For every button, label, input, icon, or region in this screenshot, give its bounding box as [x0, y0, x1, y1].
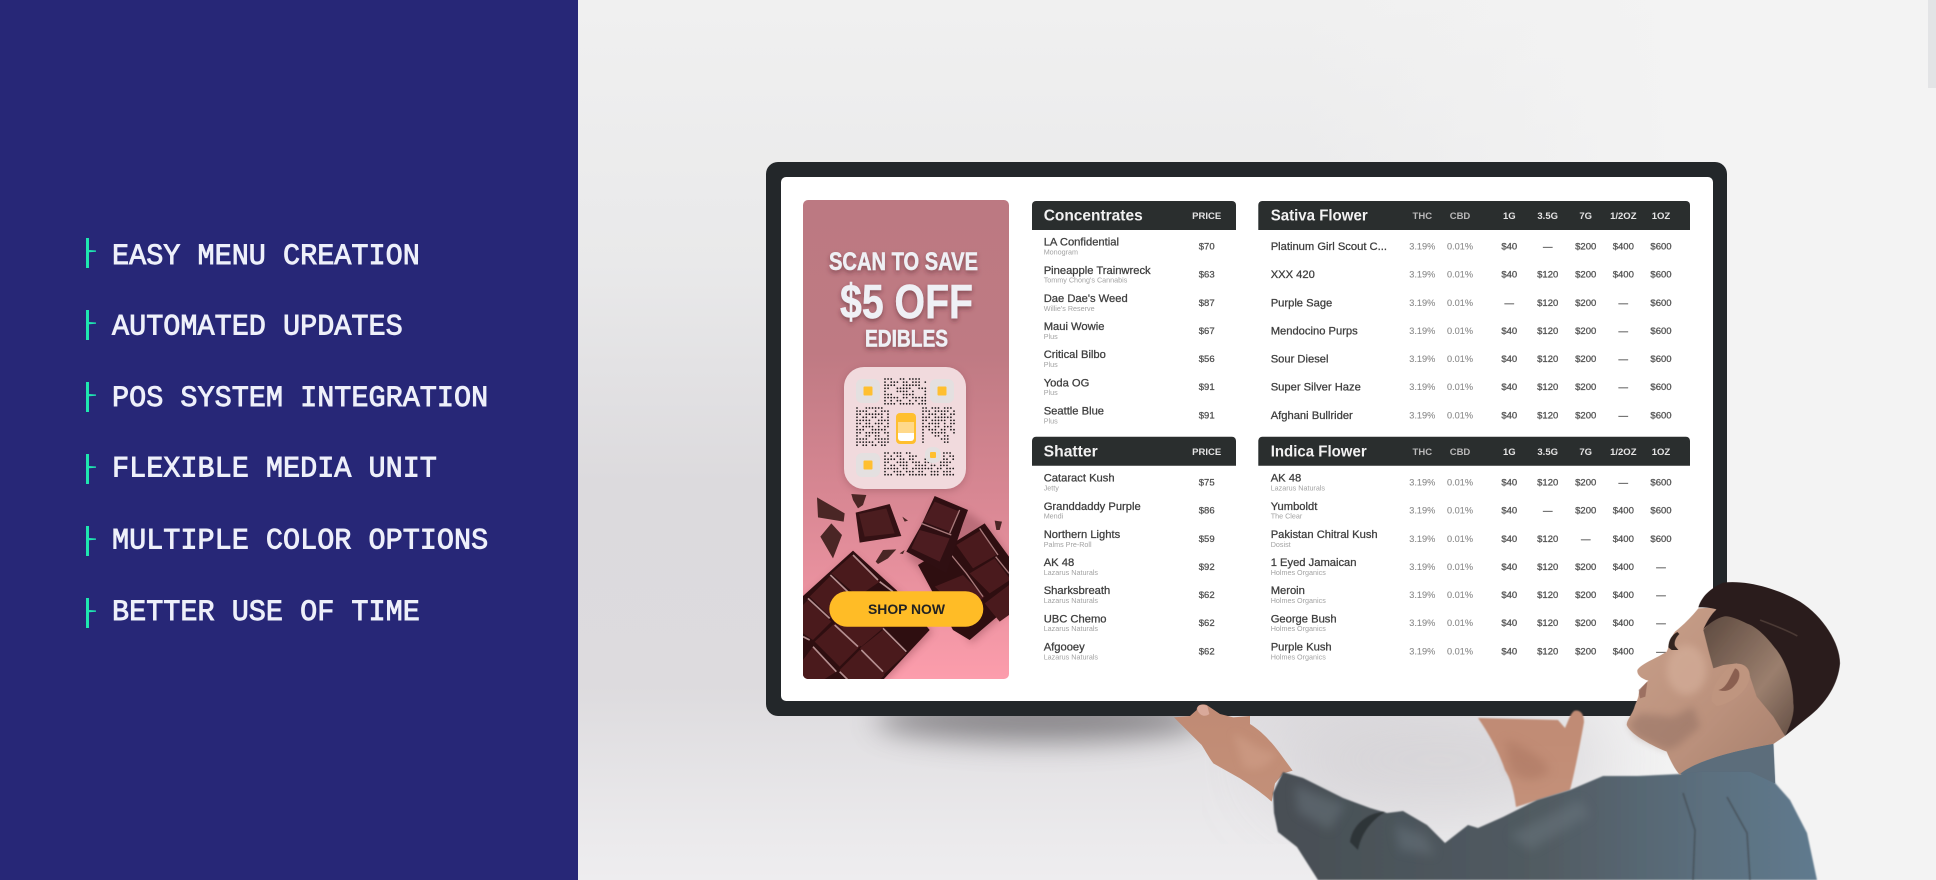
table: concentrates: Plus	[1044, 360, 1058, 369]
table: indica flower: 1G	[1503, 447, 1516, 458]
table: concentrates: PRICE	[1192, 211, 1221, 222]
face and neck	[1627, 607, 1785, 775]
table: sativa flower: —	[1543, 242, 1553, 252]
table: indica flower: George Bush	[1271, 613, 1337, 625]
table: shatter: $86	[1199, 506, 1215, 517]
table: indica flower: $600	[1650, 478, 1672, 488]
table: sativa flower: —	[1619, 326, 1629, 337]
table: shatter: Lazarus Naturals	[1044, 596, 1098, 605]
table: concentrates: Plus	[1044, 388, 1058, 397]
left feature panel	[0, 0, 578, 880]
table: indica flower: $400	[1613, 562, 1634, 573]
table: indica flower: 3.19%	[1409, 506, 1435, 516]
feature: easy menu creation: EASY MENU CREATION	[112, 240, 420, 274]
table: indica flower: $400	[1613, 618, 1634, 629]
table: concentrates: $91	[1199, 382, 1215, 393]
table: concentrates: Willie's Reserve	[1044, 304, 1095, 313]
shop now button	[829, 591, 983, 627]
table: indica flower: $40	[1501, 562, 1517, 573]
table: sativa flower: 0.01%	[1447, 298, 1473, 308]
table: concentrates	[1032, 201, 1236, 425]
table: indica flower: $200	[1575, 618, 1596, 629]
table: indica flower: $600	[1650, 534, 1672, 545]
table: shatter: $75	[1199, 478, 1215, 488]
table: indica flower: 0.01%	[1447, 534, 1473, 544]
chocolate inset	[859, 508, 895, 537]
table: sativa flower: 3.19%	[1409, 270, 1435, 280]
table: concentrates: $67	[1199, 326, 1215, 337]
table: sativa flower: $120	[1537, 298, 1558, 309]
table: indica flower: $600	[1650, 506, 1672, 517]
table: indica flower: $120	[1537, 646, 1558, 657]
table: indica flower: $200	[1575, 478, 1596, 488]
table: indica flower: 0.01%	[1447, 506, 1473, 516]
table: sativa flower: —	[1619, 382, 1629, 393]
table: sativa flower: $120	[1537, 270, 1558, 281]
table: sativa flower: $600	[1650, 326, 1672, 337]
table: shatter: Northern Lights	[1044, 529, 1121, 541]
table: indica flower: Holmes Organics	[1271, 624, 1326, 633]
feature: flexible media unit: FLEXIBLE MEDIA UNIT	[112, 452, 437, 486]
table: sativa flower: —	[1505, 298, 1515, 309]
table: sativa flower: $600	[1650, 298, 1672, 309]
table: concentrates: Yoda OG	[1044, 377, 1089, 389]
table: indica flower: $400	[1613, 534, 1634, 545]
chocolate pieces	[803, 494, 1009, 680]
table: indica flower: 3.19%	[1409, 534, 1435, 544]
table: indica flower: AK 48	[1271, 473, 1301, 485]
promo panel	[803, 200, 1009, 680]
table: sativa flower: 3.19%	[1409, 382, 1435, 392]
feature: POS system integration: POS SYSTEM INTEGRATION	[112, 382, 488, 416]
table: sativa flower: —	[1619, 410, 1629, 421]
table: indica flower: Yumboldt	[1271, 501, 1318, 513]
table: indica flower: —	[1656, 646, 1666, 657]
table: sativa flower: Sour Diesel	[1271, 354, 1329, 366]
table: sativa flower: Purple Sage	[1271, 297, 1332, 309]
eye and brow	[1668, 632, 1679, 650]
background wall	[578, 0, 1936, 880]
table: concentrates: $56	[1199, 354, 1215, 365]
table: indica flower: Purple Kush	[1271, 641, 1332, 653]
hair highlight	[1760, 620, 1797, 636]
table: shatter: UBC Chemo	[1044, 613, 1106, 625]
table: concentrates: Tommy Chong's Cannabis	[1044, 276, 1128, 285]
table: shatter: $92	[1199, 562, 1215, 573]
table: sativa flower: CBD	[1450, 211, 1470, 222]
table: sativa flower: THC	[1413, 211, 1432, 222]
monitor shadow	[875, 698, 1205, 742]
table: concentrates: $87	[1199, 298, 1215, 309]
promo headline: SCAN TO SAVE	[829, 248, 978, 276]
table: shatter: Afgooey	[1044, 641, 1085, 653]
table: concentrates: Dae Dae's Weed	[1044, 293, 1128, 305]
table: indica flower: $40	[1501, 534, 1517, 545]
table: sativa flower: $600	[1650, 354, 1672, 365]
table: shatter: Granddaddy Purple	[1044, 501, 1141, 513]
table: indica flower: —	[1543, 506, 1553, 517]
table: indica flower: —	[1656, 590, 1666, 601]
shop now button: SHOP NOW	[868, 602, 945, 617]
left hand	[1174, 704, 1293, 802]
table: indica flower: Holmes Organics	[1271, 652, 1326, 661]
hair fade	[1703, 612, 1802, 736]
table: sativa flower: 1/2OZ	[1610, 211, 1637, 222]
promo headline: EDIBLES	[865, 326, 948, 352]
table: indica flower: THC	[1413, 447, 1432, 458]
table: sativa flower: $200	[1575, 410, 1596, 421]
table: concentrates: Seattle Blue	[1044, 405, 1104, 417]
table: concentrates: $63	[1199, 270, 1215, 281]
table: sativa flower: Platinum Girl Scout C...	[1271, 241, 1387, 253]
table: shatter	[1032, 437, 1236, 661]
table: indica flower: $400	[1613, 506, 1634, 517]
table: sativa flower: $600	[1650, 410, 1672, 421]
table: indica flower: $200	[1575, 590, 1596, 601]
table: indica flower: $120	[1537, 478, 1558, 488]
promo headline: $5 OFF	[840, 276, 973, 329]
feature: multiple color options: MULTIPLE COLOR OPTIONS	[112, 524, 488, 558]
table: sativa flower: $200	[1575, 354, 1596, 365]
table: sativa flower: XXX 420	[1271, 269, 1315, 281]
table: sativa flower: $120	[1537, 354, 1558, 365]
table: indica flower: $200	[1575, 646, 1596, 657]
table: sativa flower: $200	[1575, 326, 1596, 337]
table: sativa flower: $40	[1501, 410, 1517, 421]
shirt collar edge	[1680, 744, 1775, 783]
table: sativa flower: 0.01%	[1447, 382, 1473, 392]
table: indica flower: Indica Flower	[1271, 444, 1367, 460]
table: sativa flower: $600	[1650, 270, 1672, 281]
table: indica flower: $40	[1501, 506, 1517, 517]
ear	[1712, 664, 1750, 706]
table: sativa flower	[1258, 201, 1690, 422]
table: sativa flower: $120	[1537, 382, 1558, 393]
table: sativa flower: —	[1619, 354, 1629, 365]
scrollbar strip	[1928, 0, 1936, 88]
table: indica flower: Holmes Organics	[1271, 568, 1326, 577]
table: indica flower: 3.19%	[1409, 478, 1435, 488]
table: sativa flower: $40	[1501, 242, 1517, 252]
table: sativa flower: 3.19%	[1409, 242, 1435, 252]
table: sativa flower: 7G	[1579, 211, 1592, 222]
table: concentrates: Concentrates	[1044, 208, 1143, 224]
table: shatter: Cataract Kush	[1044, 473, 1115, 485]
table: shatter: PRICE	[1192, 447, 1221, 458]
table: concentrates: $70	[1199, 242, 1215, 252]
lips	[1639, 682, 1647, 698]
table: sativa flower: $600	[1650, 382, 1672, 393]
table: indica flower: 0.01%	[1447, 618, 1473, 628]
monitor	[766, 162, 1727, 716]
table: indica flower: $200	[1575, 562, 1596, 573]
man holding the monitor	[1174, 582, 1840, 880]
table: shatter: Mendi	[1044, 512, 1064, 521]
table: concentrates: Plus	[1044, 416, 1058, 425]
table: sativa flower: $400	[1613, 270, 1634, 281]
hair	[1698, 582, 1840, 736]
QR code card	[844, 367, 966, 491]
table: sativa flower: 3.19%	[1409, 410, 1435, 420]
table: concentrates: $91	[1199, 410, 1215, 421]
large chocolate bar	[803, 551, 930, 680]
table: sativa flower: $40	[1501, 354, 1517, 365]
table: indica flower: 7G	[1579, 447, 1592, 458]
table: shatter: Shatter	[1044, 444, 1098, 460]
cheek highlight	[1667, 645, 1707, 695]
table: indica flower: Lazarus Naturals	[1271, 484, 1325, 492]
table: sativa flower: $600	[1650, 242, 1672, 252]
table: shatter: Sharksbreath	[1044, 585, 1110, 597]
table: sativa flower: Sativa Flower	[1271, 208, 1368, 224]
table: sativa flower: Afghani Bullrider	[1271, 410, 1353, 422]
feature: better use of time: BETTER USE OF TIME	[112, 596, 420, 630]
right hand	[1478, 711, 1584, 807]
table: indica flower: $40	[1501, 590, 1517, 601]
chocolate shadows	[864, 510, 1009, 679]
table: shatter: Jetty	[1044, 484, 1059, 492]
table: shatter: AK 48	[1044, 557, 1074, 569]
table: sativa flower: Mendocino Purps	[1271, 325, 1358, 337]
table: indica flower: CBD	[1450, 447, 1470, 458]
table: sativa flower: $40	[1501, 382, 1517, 393]
table: sativa flower: $200	[1575, 382, 1596, 393]
table: sativa flower: Super Silver Haze	[1271, 382, 1361, 394]
table: indica flower: Meroin	[1271, 585, 1305, 597]
table: shatter: Lazarus Naturals	[1044, 568, 1098, 577]
table: indica flower: —	[1619, 478, 1629, 488]
table: indica flower: $120	[1537, 534, 1558, 545]
table: indica flower: 3.19%	[1409, 618, 1435, 628]
table: indica flower: 1 Eyed Jamaican	[1271, 557, 1357, 569]
table: shatter: Lazarus Naturals	[1044, 624, 1098, 633]
table: indica flower: $40	[1501, 618, 1517, 629]
table: indica flower: 3.19%	[1409, 562, 1435, 572]
top middle chocolate piece	[906, 496, 968, 562]
table: sativa flower: 1G	[1503, 211, 1516, 222]
table: indica flower	[1258, 437, 1690, 661]
table: sativa flower: $40	[1501, 326, 1517, 337]
table: sativa flower: 3.19%	[1409, 326, 1435, 336]
table: shatter: Palms Pre-Roll	[1044, 540, 1092, 549]
table: shatter: $62	[1199, 590, 1215, 601]
table: sativa flower: $200	[1575, 298, 1596, 309]
table: concentrates: Plus	[1044, 332, 1058, 341]
table: sativa flower: $40	[1501, 270, 1517, 281]
table: indica flower: 3.5G	[1537, 447, 1558, 458]
table: indica flower: 0.01%	[1447, 562, 1473, 572]
table: indica flower: Pakistan Chitral Kush	[1271, 529, 1378, 541]
feature: automated updates: AUTOMATED UPDATES	[112, 310, 403, 344]
table: indica flower: 3.19%	[1409, 646, 1435, 656]
table: indica flower: —	[1581, 534, 1591, 545]
promo headline	[829, 248, 978, 352]
table: sativa flower: —	[1619, 298, 1629, 309]
table: concentrates: Monogram	[1044, 248, 1078, 256]
table: sativa flower: $120	[1537, 326, 1558, 337]
table: sativa flower: 0.01%	[1447, 326, 1473, 336]
table: concentrates: Maui Wowie	[1044, 321, 1104, 333]
table: concentrates: Pineapple Trainwreck	[1044, 265, 1151, 277]
table: indica flower: The Clear	[1271, 512, 1303, 521]
table: indica flower: $40	[1501, 646, 1517, 657]
table: indica flower: $120	[1537, 562, 1558, 573]
table: shatter: $59	[1199, 534, 1215, 545]
ear inner	[1718, 668, 1739, 691]
table: indica flower: 0.01%	[1447, 646, 1473, 656]
table: indica flower: 0.01%	[1447, 478, 1473, 488]
table: indica flower: —	[1656, 562, 1666, 573]
stubble	[1628, 707, 1700, 750]
right chocolate bar	[918, 523, 1009, 640]
table: sativa flower: $400	[1613, 242, 1634, 252]
shirt	[1273, 743, 1817, 880]
table: sativa flower: $200	[1575, 242, 1596, 252]
table: sativa flower: $120	[1537, 410, 1558, 421]
table: sativa flower: 0.01%	[1447, 410, 1473, 420]
table: indica flower: 0.01%	[1447, 590, 1473, 600]
table: sativa flower: 3.19%	[1409, 298, 1435, 308]
menu tables	[1032, 201, 1690, 661]
table: sativa flower: $200	[1575, 270, 1596, 281]
table: sativa flower: 1OZ	[1652, 211, 1670, 222]
table: indica flower: 3.19%	[1409, 590, 1435, 600]
table: indica flower: $120	[1537, 618, 1558, 629]
table: indica flower: $120	[1537, 590, 1558, 601]
table: indica flower: 1/2OZ	[1610, 447, 1637, 458]
table: shatter: $62	[1199, 646, 1215, 657]
chocolate shards	[817, 494, 1002, 564]
table: shatter: $62	[1199, 618, 1215, 629]
small chocolate piece	[856, 504, 901, 543]
table: indica flower: $400	[1613, 590, 1634, 601]
table: indica flower: $200	[1575, 506, 1596, 517]
head	[1627, 582, 1840, 783]
table: concentrates: Critical Bilbo	[1044, 349, 1106, 361]
table: indica flower: Dosist	[1271, 540, 1291, 549]
table: shatter: Lazarus Naturals	[1044, 652, 1098, 661]
table: sativa flower: 0.01%	[1447, 242, 1473, 252]
table: sativa flower: 3.5G	[1537, 211, 1558, 222]
table: sativa flower: 0.01%	[1447, 354, 1473, 364]
table: indica flower: 1OZ	[1652, 447, 1670, 458]
table: concentrates: LA Confidential	[1044, 237, 1119, 249]
table: sativa flower: 0.01%	[1447, 270, 1473, 280]
table: indica flower: Holmes Organics	[1271, 596, 1326, 605]
table: indica flower: $40	[1501, 478, 1517, 488]
table: indica flower: —	[1656, 618, 1666, 629]
table: sativa flower: 3.19%	[1409, 354, 1435, 364]
table: indica flower: $400	[1613, 646, 1634, 657]
